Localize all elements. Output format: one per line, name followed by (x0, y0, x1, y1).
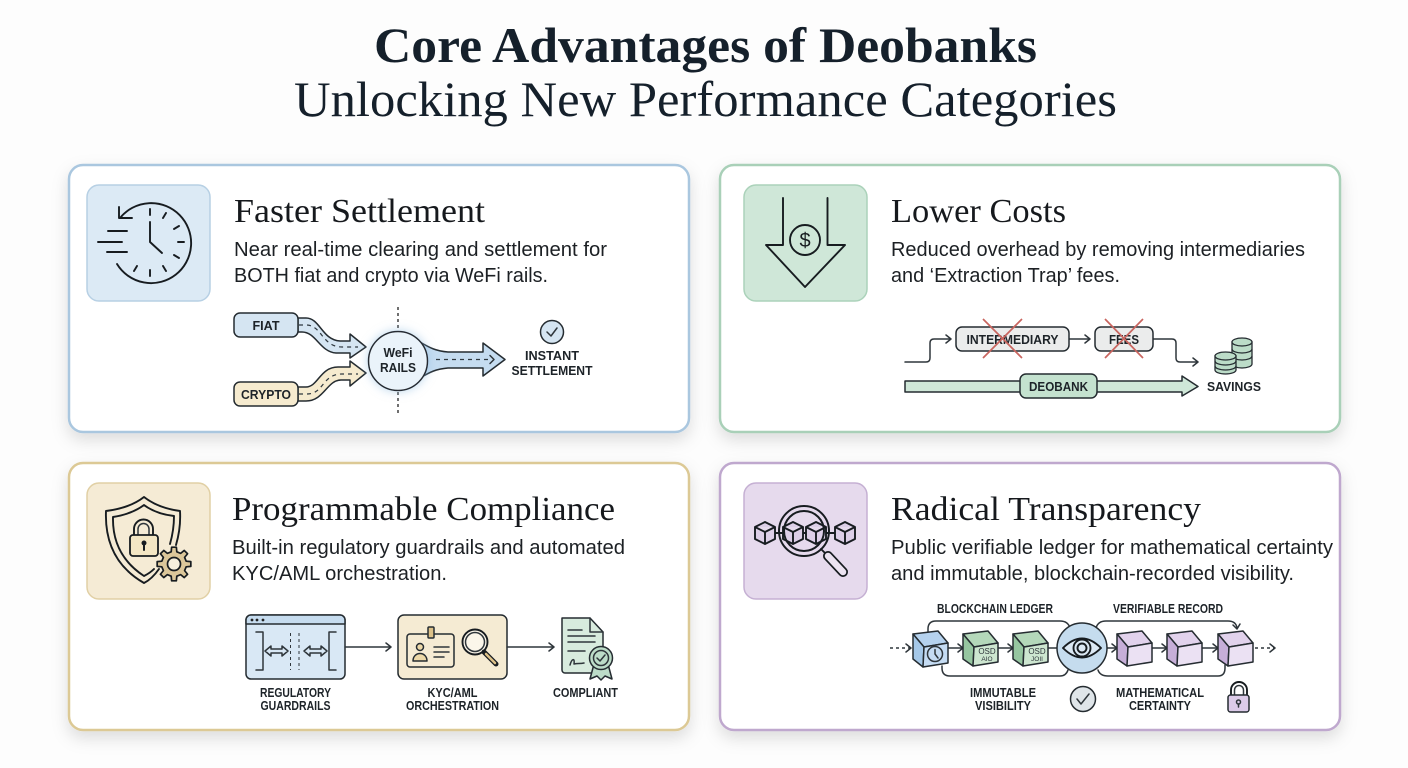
node: WeFi rails (368, 332, 428, 390)
blocks: blue clock block (913, 631, 948, 667)
labels: bottom: VISIBILITY (975, 699, 1032, 713)
node: crypto (234, 382, 298, 406)
icon: shield, lock and gear (87, 483, 210, 599)
text: faster settlement description: BOTH fiat and crypto via WeFi rails. (234, 265, 548, 287)
node: fees (1095, 319, 1153, 358)
diagram: compliance flow (246, 615, 618, 713)
panel: faster settlement (69, 165, 689, 432)
arrows: chain links (906, 644, 1275, 652)
icon: coins (1215, 338, 1252, 374)
node: fiat: FIAT (252, 319, 280, 333)
label: instant settlement: INSTANT (525, 349, 579, 363)
title: Core Advantages of Deobanks (374, 17, 1037, 73)
labels: compliance flow (260, 686, 618, 713)
panel: radical transparency (720, 463, 1340, 730)
node: deobank: DEOBANK (1029, 380, 1088, 394)
text: lower costs description: Reduced overhead by removing intermediaries (891, 239, 1305, 261)
icon: padlock (1228, 682, 1249, 712)
arrow: deobank route (905, 376, 1198, 396)
blocks: purple block one (1117, 631, 1152, 666)
text: transparency description: Public verifiable ledger for mathematical certainty (891, 537, 1333, 559)
label: instant settlement: SETTLEMENT (512, 364, 593, 378)
label: savings: SAVINGS (1207, 380, 1261, 394)
blocks: purple block three (1218, 631, 1253, 666)
text: compliance description (232, 537, 625, 585)
labels: compliance flow: COMPLIANT (553, 686, 618, 700)
node: deobank (1020, 374, 1097, 398)
arrow: legacy route (905, 335, 1198, 366)
labels: bottom: IMMUTABLE (970, 686, 1036, 700)
heading: radical transparency: Radical Transparency (891, 491, 1201, 528)
diagram: intermediaries removed (905, 319, 1261, 398)
icon: down arrow with dollar: $ (799, 230, 811, 252)
text: compliance description: Built-in regulatory guardrails and automated (232, 537, 625, 559)
panel: programmable compliance (69, 463, 689, 730)
icon: KYC ID and magnifier (398, 615, 507, 679)
arrow: crypto flow (298, 361, 366, 401)
arrow: fiat flow (298, 318, 366, 358)
heading: lower costs: Lower Costs (891, 193, 1066, 230)
labels: compliance flow: ORCHESTRATION (406, 699, 499, 713)
node: intermediary (956, 319, 1069, 358)
labels: bottom: CERTAINTY (1129, 699, 1192, 713)
icon: regulatory guardrails window (246, 615, 345, 679)
labels: bottom: MATHEMATICAL (1116, 686, 1204, 700)
label: instant settlement (512, 349, 593, 378)
labels: top (937, 602, 1223, 616)
arrow: guardrails to KYC (345, 643, 391, 651)
text: faster settlement description (234, 239, 607, 287)
heading: faster settlement: Faster Settlement (234, 193, 486, 230)
text: lower costs description (891, 239, 1305, 287)
text: transparency description (891, 537, 1333, 585)
labels: compliance flow: GUARDRAILS (260, 699, 330, 713)
blocks: green block one (963, 631, 998, 666)
brackets: connecting arcs (928, 621, 1240, 676)
panel: lower costs (720, 165, 1340, 432)
arrow: KYC to compliant (507, 643, 554, 651)
text: transparency description: and immutable, blockchain-recorded visibility. (891, 563, 1294, 585)
node: intermediary: INTERMEDIARY (966, 333, 1059, 347)
labels: compliance flow: REGULATORY (260, 686, 332, 700)
blocks: green block two: JOII (1031, 656, 1043, 663)
icon: magnifier over blockchain (744, 483, 867, 599)
arrows: dashed lead-in and lead-out (890, 647, 1274, 649)
node: fiat (234, 313, 298, 337)
arrow: output flow (420, 342, 505, 378)
title (294, 17, 1117, 127)
icon: check (540, 320, 564, 344)
diagram: blockchain ledger (890, 602, 1275, 713)
node: fees: FEES (1109, 333, 1139, 347)
node: crypto: CRYPTO (241, 388, 291, 402)
blocks: green block two: OSD (1028, 647, 1046, 656)
node: WeFi rails: WeFi (384, 346, 412, 360)
diagram: fiat and crypto to WeFi rails (234, 307, 593, 413)
blocks: green block two (1013, 631, 1048, 666)
title: Unlocking New Performance Categories (294, 71, 1117, 127)
labels: compliance flow: KYC/AML (428, 686, 478, 700)
icon: eye (1057, 623, 1107, 673)
icon: clock with speed lines (87, 185, 210, 301)
blocks: purple block two (1167, 631, 1202, 666)
text: compliance description: KYC/AML orchestration. (232, 563, 447, 585)
node: WeFi rails: RAILS (380, 361, 416, 375)
heading: programmable compliance: Programmable Compliance (232, 491, 615, 528)
blocks: green block one: AIO (981, 656, 993, 663)
labels: top: VERIFIABLE RECORD (1113, 602, 1223, 616)
icon: check (1070, 686, 1096, 712)
icon: compliant document with seal (562, 618, 612, 680)
text: lower costs description: and ‘Extraction Trap’ fees. (891, 265, 1120, 287)
labels: bottom (970, 686, 1204, 713)
blocks: green block one: OSD (978, 647, 996, 656)
icon: down arrow with dollar (744, 185, 867, 301)
labels: top: BLOCKCHAIN LEDGER (937, 602, 1053, 616)
text: faster settlement description: Near real-time clearing and settlement for (234, 239, 607, 261)
